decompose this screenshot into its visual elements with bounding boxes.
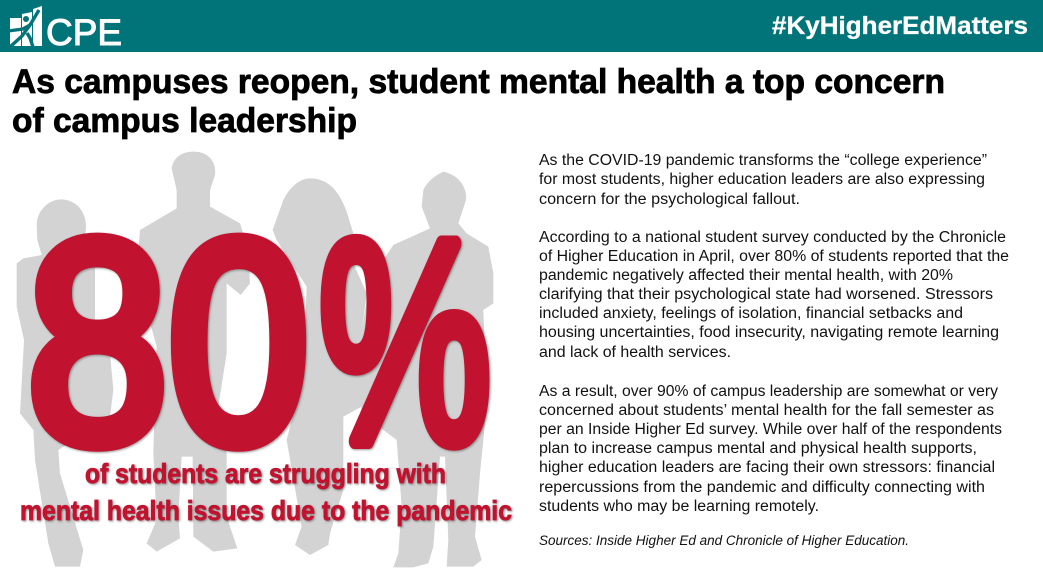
sources note: Sources: Inside Higher Ed and Chronicle of Higher Education. [539,533,909,548]
paragraph 2: pandemic negatively affected their mental health, with 20% [539,267,953,284]
person 1 [17,199,113,567]
paragraph 3: higher education leaders are facing their own stressors: financial [539,459,995,476]
paragraph 1: concern for the psychological fallout. [539,191,800,208]
statistic caption: of students are struggling with [85,458,446,489]
paragraph 3 [539,383,1002,515]
80 figure: 80 [27,181,309,502]
paragraph 1: for most students, higher education leaders are also expressing [539,171,985,188]
paragraph 1: As the COVID-19 pandemic transforms the “college experience” [539,152,987,169]
person 2 [137,152,250,552]
paragraph 2: and lack of health services. [539,344,731,361]
paragraph 3: plan to increase campus mental and physical health supports, [539,440,977,457]
paragraph 1 [539,152,987,208]
paragraph 2: clarifying that their psychological state had worsened. Stressors [539,286,993,303]
logo wordmark: CPE [46,11,122,53]
header band [0,0,1043,52]
paragraph 3: per an Inside Higher Ed survey. While over half of the respondents [539,421,1002,438]
statistic caption [20,458,512,526]
title: of campus leadership [12,102,357,140]
silhouettes of four students [17,152,493,567]
paragraph 3: students who may be learning remotely. [539,498,819,515]
paragraph 2: housing uncertainties, food insecurity, navigating remote learning [539,324,999,341]
paragraph 2: According to a national student survey conducted by the Chronicle [539,229,1006,246]
body copy [539,152,1009,548]
person 4 [358,172,493,567]
big statistic [27,181,491,502]
paragraph 2: included anxiety, feelings of isolation, financial setbacks and [539,305,963,322]
paragraph 3: repercussions from the pandemic and difficulty connecting with [539,479,985,496]
paragraph 3: As a result, over 90% of campus leadership are somewhat or very [539,383,998,400]
paragraph 2 [539,229,1009,361]
statistic caption: mental health issues due to the pandemic [20,495,512,526]
icon: CPE logo mark [8,6,42,47]
CPE logo [8,6,122,53]
person 3 [273,178,367,555]
paragraph 3: concerned about students’ mental health for the fall semester as [539,402,994,419]
percent sign: % [319,181,491,502]
title [12,63,945,140]
hashtag: #KyHigherEdMatters [772,12,1028,40]
title: As campuses reopen, student mental health a top concern [12,63,945,101]
paragraph 2: of Higher Education in April, over 80% of students reported that the [539,248,1009,265]
